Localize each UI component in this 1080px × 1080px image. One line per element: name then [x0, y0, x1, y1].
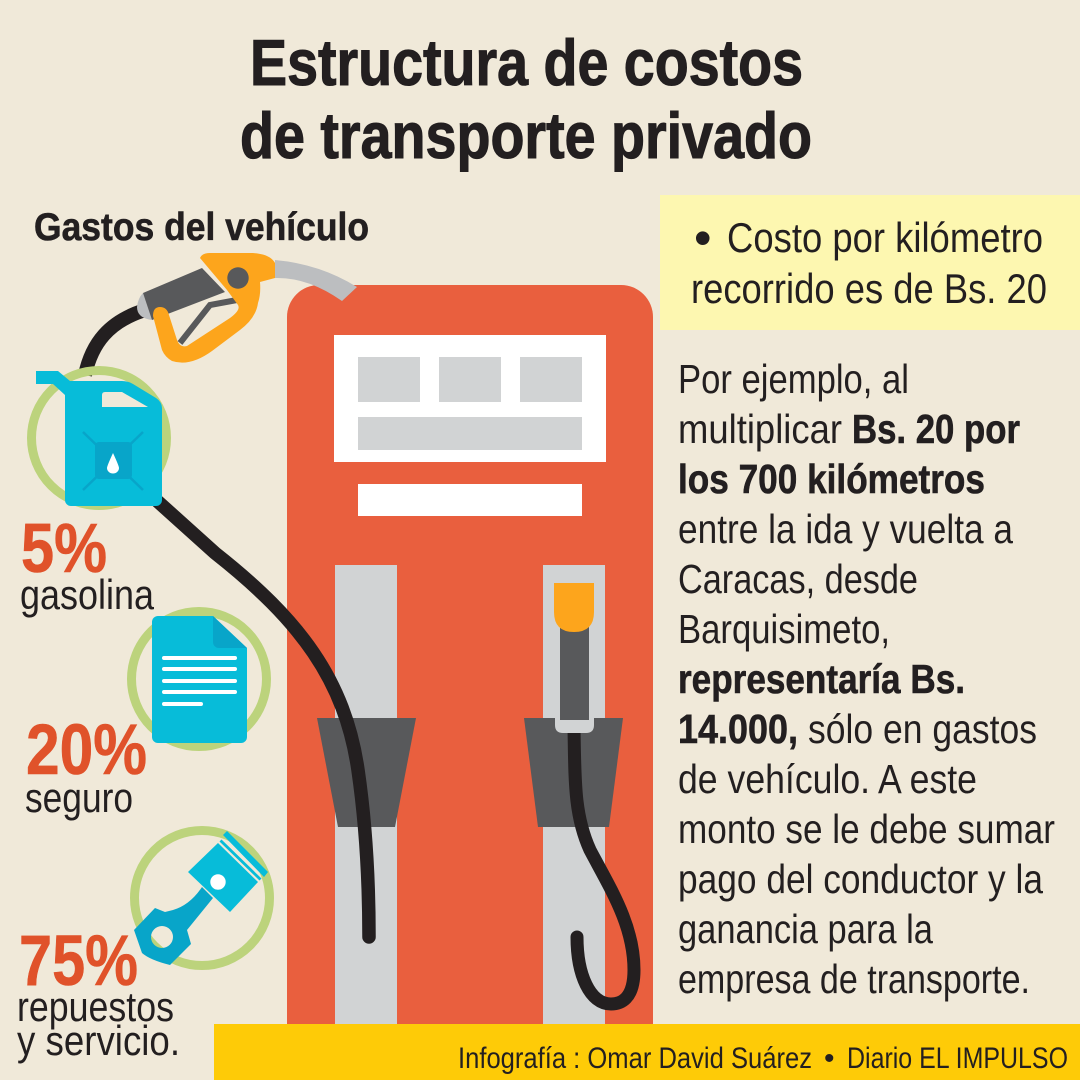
stat: gasoline 5% [20, 509, 155, 618]
callout: cost per kilometre: • [694, 210, 712, 266]
title: de transporte privado [240, 99, 812, 172]
text block: example explanation: Bs. 20 por [852, 406, 1020, 452]
stat: insurance 20%: 20% [26, 711, 147, 790]
text block: example explanation: multiplicar [678, 406, 842, 452]
right holster [524, 718, 623, 827]
right hose [574, 728, 634, 1004]
left column [335, 565, 397, 1024]
stat: parts and service 75%: y servicio. [17, 1017, 180, 1064]
panel: fuel pump [287, 285, 653, 1024]
icon: fuel nozzle [85, 253, 357, 375]
stat: parts and service 75%: 75% [19, 922, 138, 1001]
text block: example explanation: Por ejemplo, al [678, 356, 909, 402]
left holster [317, 718, 416, 827]
title [240, 26, 812, 172]
icon: document [132, 612, 266, 746]
text block: example explanation: ganancia para la [678, 906, 933, 952]
stat: parts and service 75% [17, 922, 180, 1064]
callout: cost per kilometre [660, 195, 1080, 330]
text block: example explanation: los 700 kilómetros [678, 456, 985, 502]
stat: insurance 20% [25, 711, 147, 821]
icon: fuel can [32, 370, 166, 506]
pump display [334, 335, 606, 462]
text block: example explanation [678, 356, 1055, 1002]
stat: parts and service 75%: repuestos [17, 983, 174, 1030]
text block: example explanation: 14.000, [678, 706, 798, 752]
right column [543, 565, 605, 1024]
main hose [155, 499, 369, 937]
stat: gasoline 5%: 5% [21, 509, 107, 587]
footer credit bar: • [824, 1042, 835, 1075]
title: Estructura de costos [250, 26, 803, 99]
stat: gasoline 5%: gasolina [20, 571, 155, 618]
text block: example explanation: Barquisimeto, [678, 606, 890, 652]
holstered nozzle [554, 583, 594, 733]
text block: example explanation: entre la ida y vuelta a [678, 506, 1013, 552]
icon: piston [134, 830, 270, 966]
text block: example explanation: sólo en gastos [808, 706, 1037, 752]
stat: insurance 20%: seguro [25, 774, 133, 821]
text block: example explanation: representaría Bs. [678, 656, 965, 702]
pump white bar [358, 484, 582, 516]
text block: example explanation: Caracas, desde [678, 556, 918, 602]
text block: example explanation: de vehículo. A este [678, 756, 977, 802]
footer credit bar: Infografía : Omar David Suárez [458, 1042, 812, 1075]
footer credit bar [214, 1024, 1080, 1080]
heading: vehicle expenses: Gastos del vehículo [34, 206, 369, 249]
